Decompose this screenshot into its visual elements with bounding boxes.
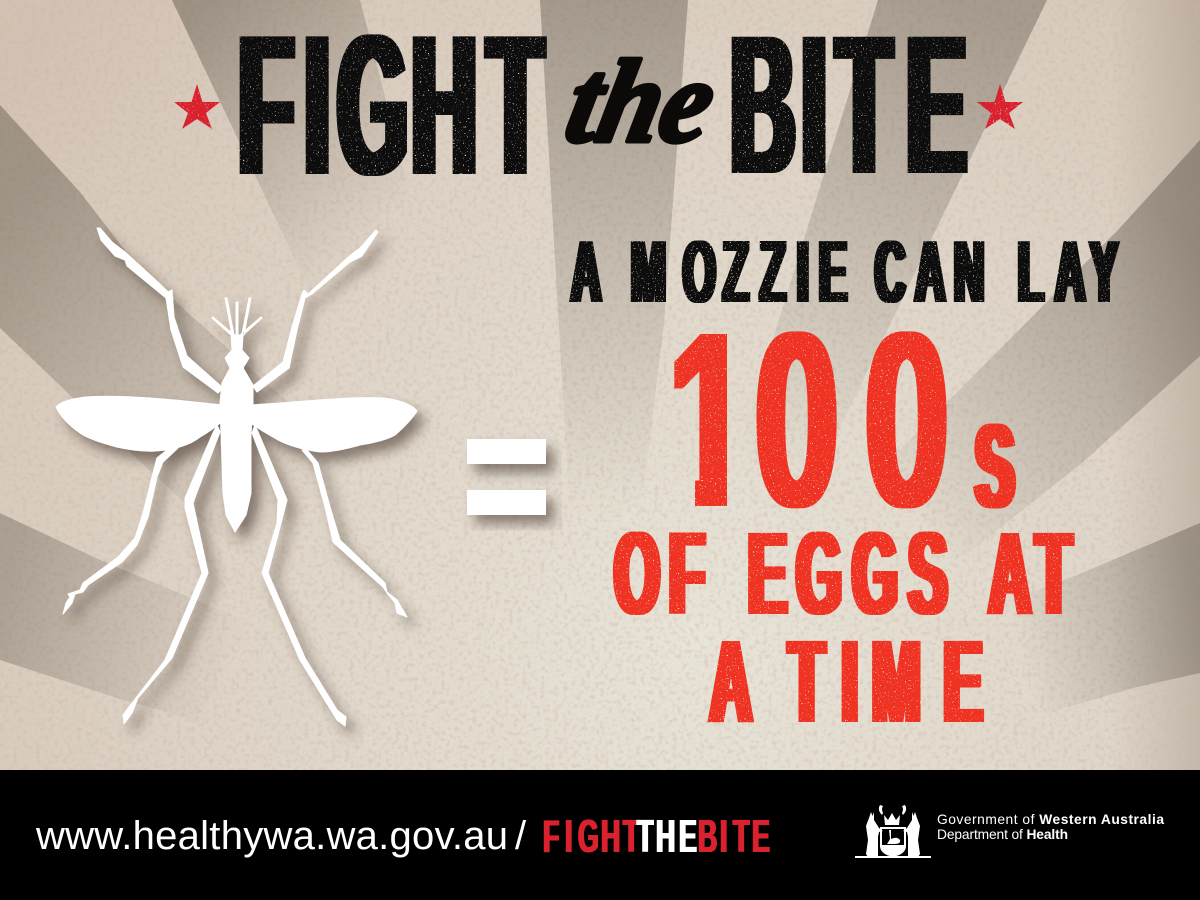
- footer: Fight the Bite wordmark: [543, 810, 770, 862]
- title word: BITE: BITE: [731, 0, 966, 216]
- star: right: [977, 84, 1023, 129]
- footer: Fight the Bite wordmark: FIGHT: [543, 810, 639, 862]
- footer: Fight the Bite wordmark: THE: [637, 810, 697, 862]
- title word: the: the: [557, 36, 726, 167]
- footer: Department of Health: Department of Health: [937, 827, 1068, 842]
- star: left: [174, 84, 220, 129]
- footer: Government of Western Australia: Government of Western Australia: [937, 812, 1164, 827]
- text: 100s headline number: 00: [755, 280, 949, 559]
- footer: Fight the Bite wordmark: BITE: [698, 810, 770, 862]
- text: a time: A TIME: [710, 615, 982, 747]
- text: 100s headline number: s: [974, 367, 1015, 540]
- text: A mozzie can lay: A MOZZIE CAN LAY: [571, 223, 1118, 321]
- icon: white mosquito silhouette: [56, 228, 417, 726]
- title word: FIGHT: FIGHT: [239, 0, 543, 217]
- text: of eggs at: OF EGGS AT: [615, 507, 1071, 639]
- icon: equals sign: [467, 439, 546, 515]
- footer: slash: /: [515, 814, 527, 858]
- title: Fight the Bite: [174, 0, 1023, 217]
- footer bar: [0, 770, 1200, 900]
- text: 100s headline number: 1: [668, 280, 752, 559]
- icon: Western Australia coat of arms: [855, 805, 931, 858]
- footer: website url: www.healthywa.wa.gov.au: [35, 814, 508, 858]
- text: 100s headline number: [674, 331, 1016, 508]
